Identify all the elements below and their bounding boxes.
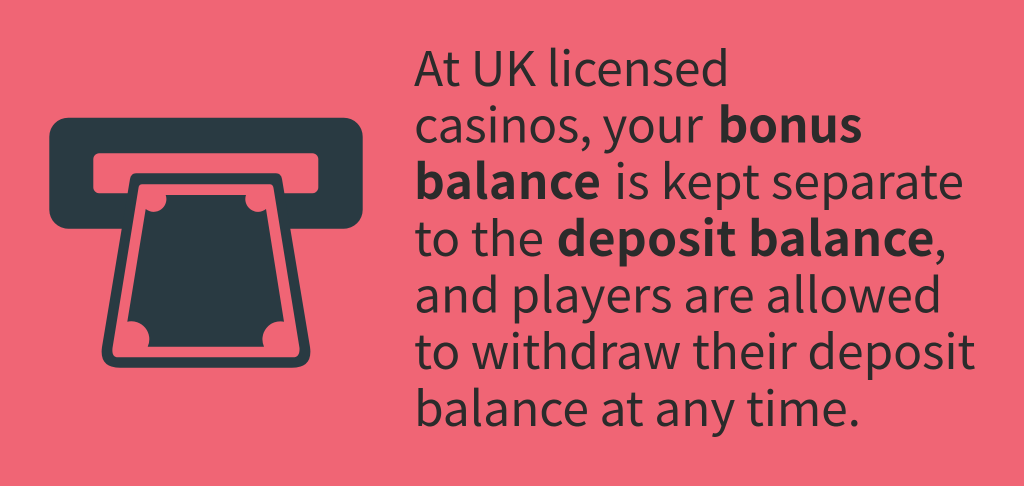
text line 2: casinos, your <box>414 86 703 156</box>
text line 7: balance at any time. <box>414 370 861 440</box>
text line 2: bonus <box>718 86 862 156</box>
icon: cash machine with banknote <box>49 118 363 368</box>
icon: banknote centre <box>127 195 284 347</box>
text line 3 <box>414 143 964 213</box>
text line 1: At UK licensed <box>414 30 730 100</box>
text line 4: deposit balance <box>556 200 934 270</box>
icon: banknote pink border <box>112 184 300 357</box>
text line 4: to the <box>414 200 544 270</box>
text line 5: and players are allowed <box>414 256 942 326</box>
icon: card slot <box>93 153 318 193</box>
text line 2 <box>414 86 862 156</box>
text line 3: is kept separate <box>614 143 964 213</box>
icon: banknote outer frame <box>102 173 310 368</box>
text line 4: , <box>934 200 947 270</box>
icon: machine body <box>49 118 363 229</box>
text block: bonus balance explanation <box>414 30 976 440</box>
text line 6: to withdraw their deposit <box>414 313 976 383</box>
text line 3: balance <box>414 143 601 213</box>
